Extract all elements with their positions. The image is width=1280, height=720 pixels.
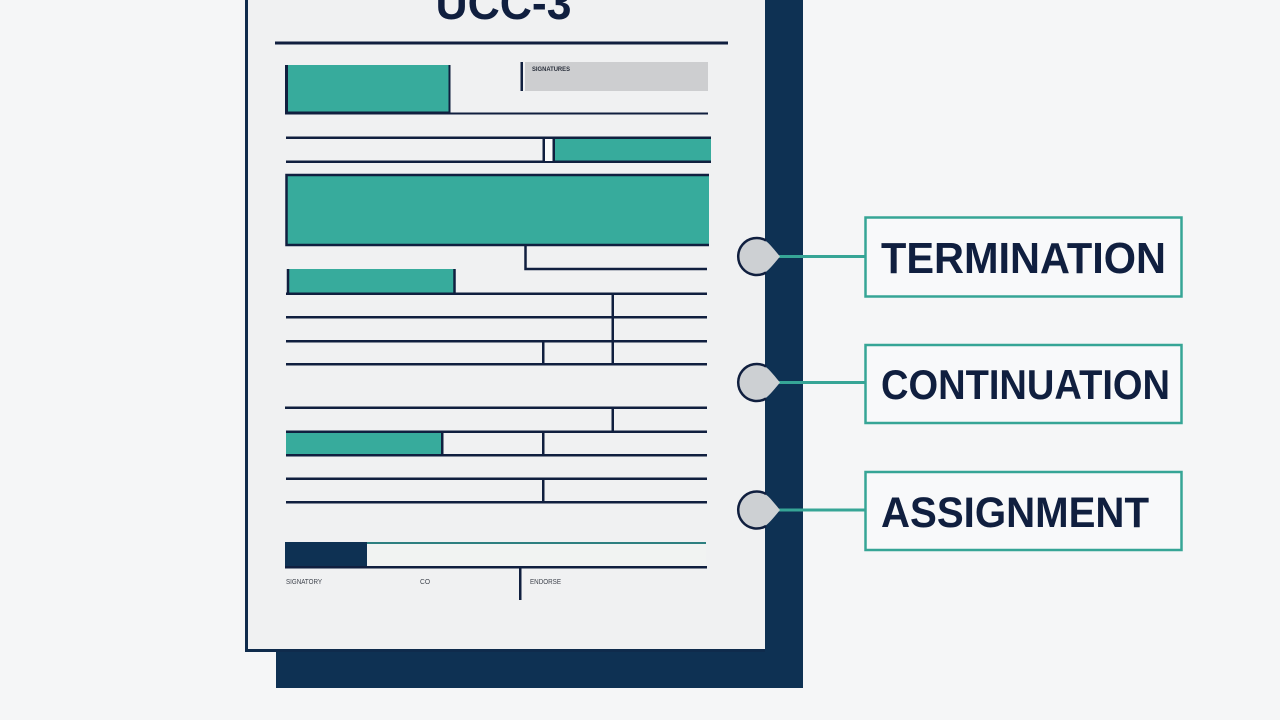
label: continuation [866,345,1182,423]
label: termination [866,218,1182,296]
connector: termination [738,238,866,275]
form header: teal field [286,65,708,114]
signature block: CO [420,579,431,586]
label: assignment: ASSIGNMENT [881,489,1149,537]
icon: grey pin [738,364,780,401]
lined section one [286,269,707,366]
icon: grey pin [738,492,780,529]
connector: continuation [738,364,866,401]
document drop shadow [276,0,803,688]
signature block: ENDORSE [530,579,561,586]
signature block small text: SIGNATORY [286,579,322,586]
large teal block [286,175,709,245]
label: continuation: CONTINUATION [881,361,1170,408]
bracket row [526,246,707,269]
lined section two [285,406,707,504]
signature block [285,542,707,600]
form header: grey field [520,62,708,91]
grey field small text: SIGNATURES [532,67,570,73]
panel: UCC-3 document [246,0,765,650]
label: termination: TERMINATION [881,234,1166,283]
icon: grey pin [738,238,780,275]
label: assignment [866,472,1182,550]
title rule [275,42,728,44]
row with teal field [286,136,711,163]
connector: assignment [738,492,866,529]
